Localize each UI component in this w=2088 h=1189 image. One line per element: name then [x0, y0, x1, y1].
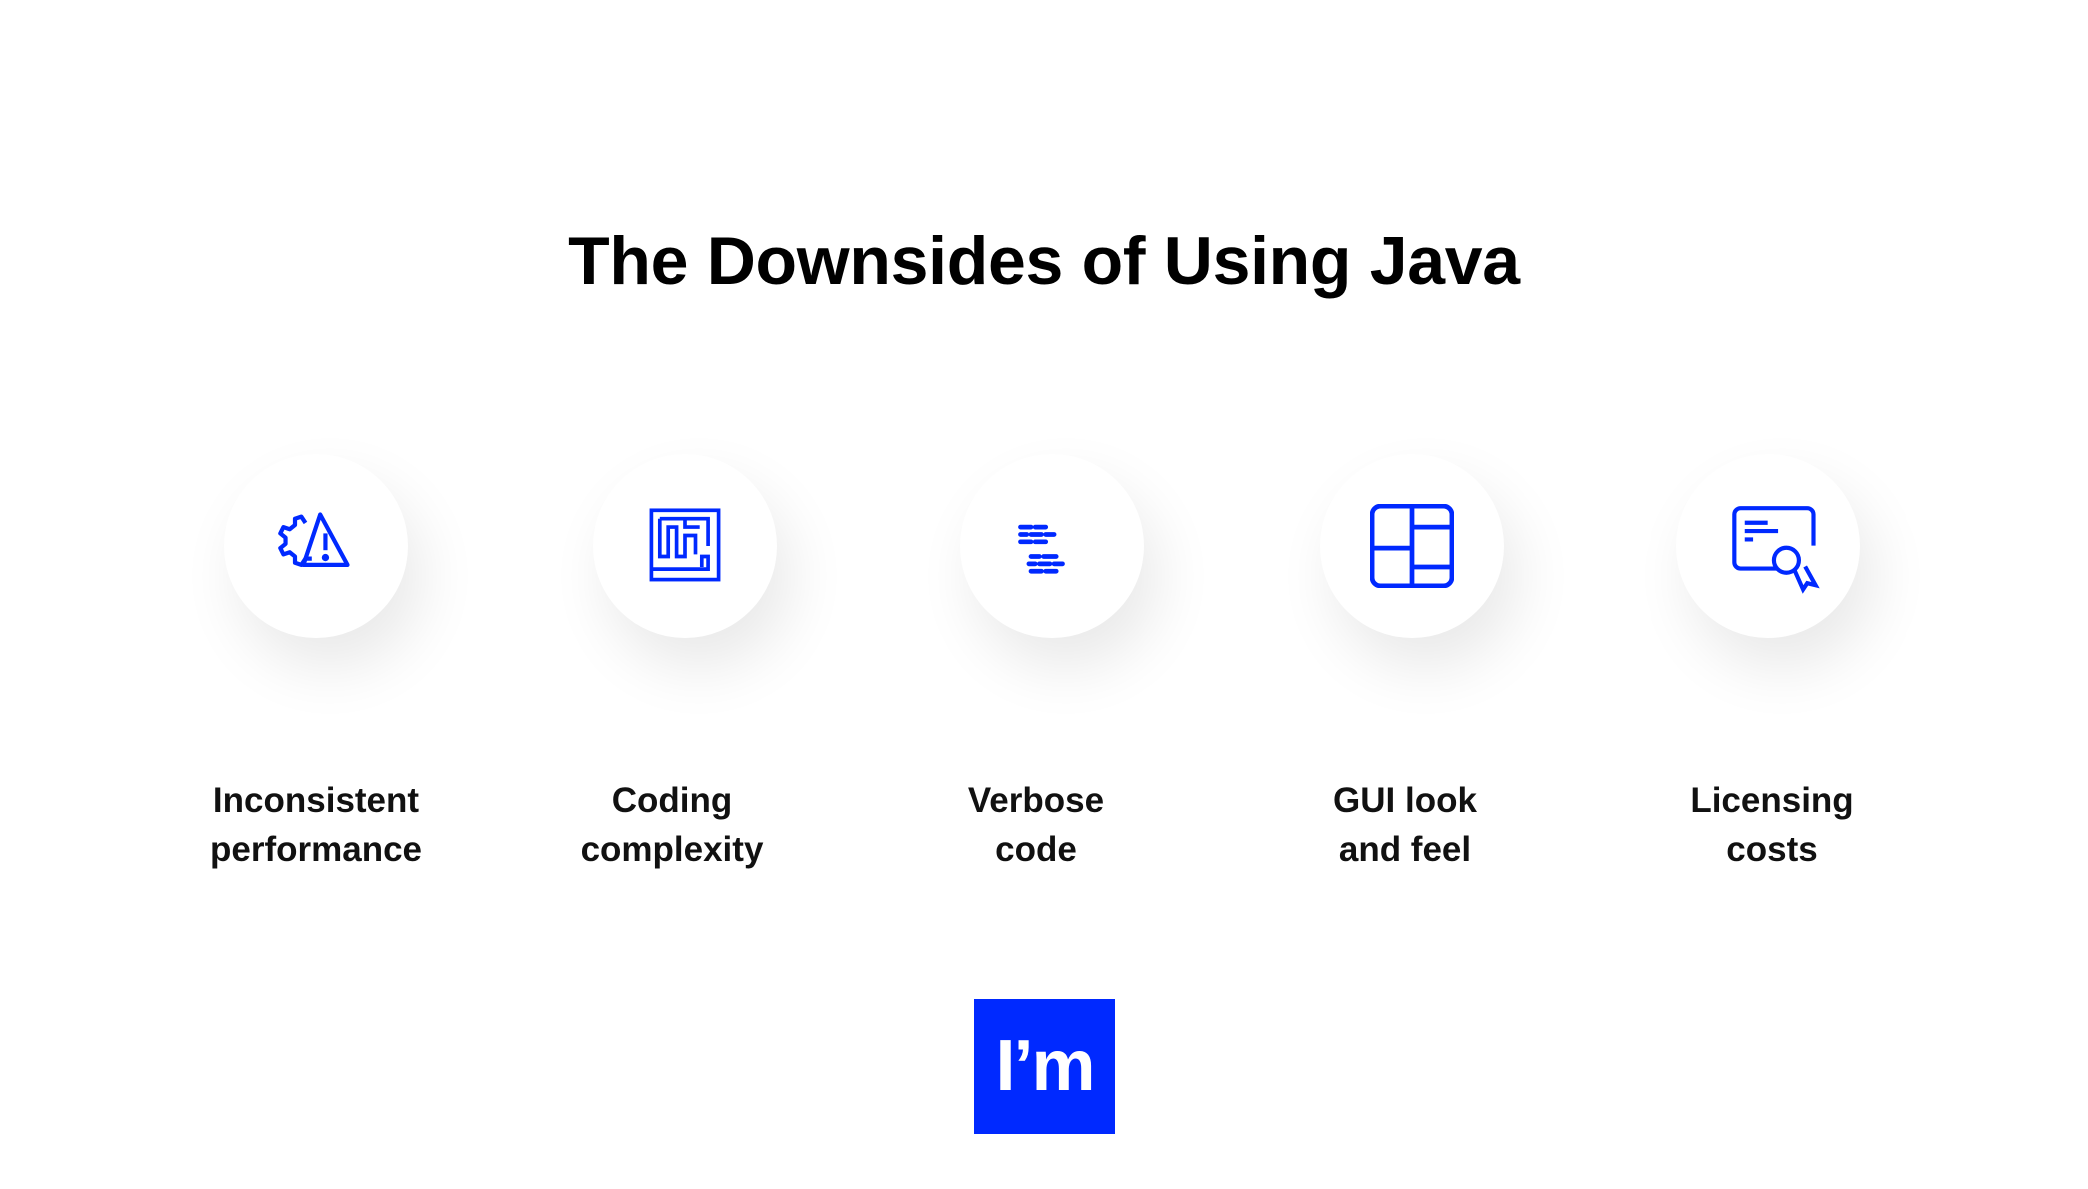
label — [581, 781, 764, 869]
label — [968, 781, 1104, 869]
label: Licensing — [1690, 781, 1854, 820]
icon: certificate — [1676, 454, 1860, 638]
logo — [974, 999, 1115, 1134]
icon: maze — [593, 454, 777, 638]
label — [1690, 781, 1854, 869]
label: costs — [1726, 830, 1818, 869]
item: licensing — [1688, 506, 1878, 869]
label: Verbose — [968, 781, 1104, 820]
label: performance — [210, 830, 422, 869]
label: and feel — [1339, 830, 1471, 869]
label: code — [995, 830, 1077, 869]
item: inconsistent performance — [210, 512, 426, 869]
item: verbose code — [968, 514, 1162, 869]
label — [210, 781, 422, 869]
item: coding complexity — [581, 508, 795, 869]
icon: code lines — [960, 454, 1144, 638]
item: gui — [1332, 504, 1522, 869]
label: complexity — [581, 830, 763, 869]
label: Coding — [612, 781, 732, 820]
label — [1333, 781, 1477, 869]
icon: layout grid — [1320, 454, 1504, 638]
logo: I’m — [995, 1026, 1094, 1106]
label: GUI look — [1333, 781, 1477, 820]
title: The Downsides of Using Java — [568, 223, 1520, 299]
label: Inconsistent — [213, 781, 419, 820]
icon: gear warning — [224, 454, 408, 638]
